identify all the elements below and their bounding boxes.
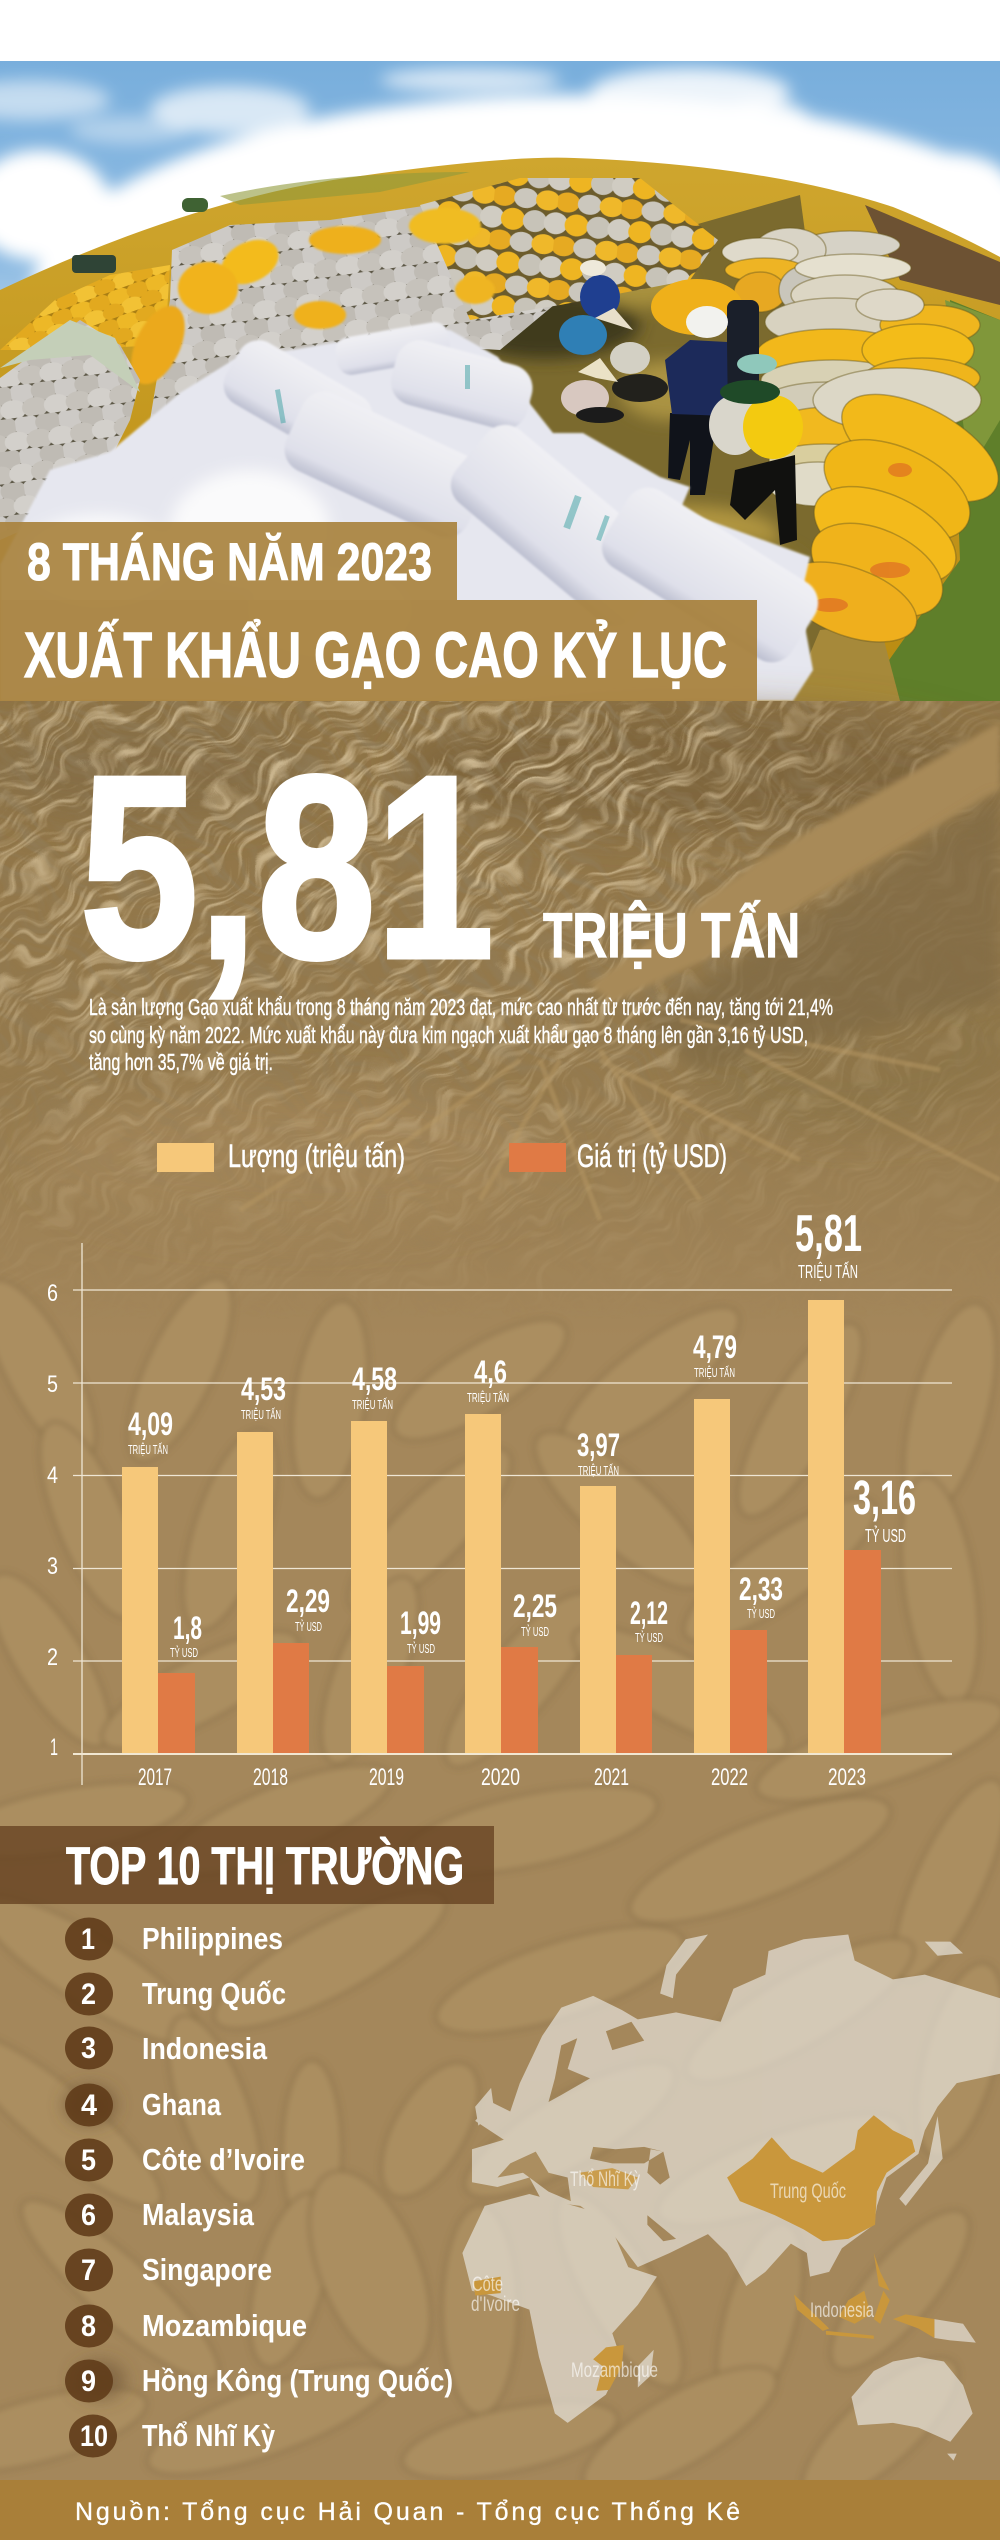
ranked list of markets: 1 bbox=[81, 1923, 95, 1956]
volume value labels: TRIỆU TẤN bbox=[694, 1365, 735, 1380]
ranked list of markets: Ghana bbox=[142, 2087, 222, 2122]
legend: volume label: Lượng (triệu tấn) bbox=[228, 1138, 405, 1174]
right stack of sacks bbox=[722, 228, 1000, 658]
volume value labels: 3,97 bbox=[577, 1427, 620, 1463]
unit: triệu tấn: TRIỆU TẤN bbox=[543, 900, 800, 971]
year labels: 2021 bbox=[594, 1764, 629, 1791]
ranked list of markets bbox=[65, 1918, 453, 2458]
sack piles bbox=[0, 265, 170, 350]
ranked list of markets: Trung Quốc bbox=[142, 1976, 286, 2011]
price value labels: TỶ USD bbox=[747, 1606, 775, 1621]
panel: rice grain background bbox=[0, 1265, 1000, 2524]
ranked list of markets: Mozambique bbox=[142, 2308, 307, 2343]
y axis labels: 5 bbox=[47, 1371, 58, 1398]
big number 5,81: 5,81 bbox=[80, 723, 494, 1013]
price value labels: TỶ USD bbox=[635, 1630, 663, 1645]
price value labels bbox=[170, 1472, 916, 1660]
ranked list of markets: 6 bbox=[81, 2199, 96, 2232]
section heading: top 10 markets: TOP 10 THỊ TRƯỜNG bbox=[66, 1836, 464, 1896]
ranked list of markets: 8 bbox=[81, 2310, 96, 2343]
map highlight: China bbox=[727, 2115, 915, 2241]
y axis labels: 2 bbox=[47, 1644, 58, 1671]
chart legend bbox=[157, 1138, 727, 1174]
banner: xuất khẩu gạo cao kỷ lục bbox=[0, 600, 757, 701]
world map with highlighted markets bbox=[462, 1934, 1000, 2461]
panel: hero photo of rice sacks and workers bbox=[0, 61, 1000, 701]
price value labels: TỶ USD bbox=[521, 1624, 549, 1639]
price value labels: TỶ USD bbox=[865, 1525, 906, 1546]
map highlight: Mozambique bbox=[593, 2345, 624, 2391]
year labels bbox=[138, 1764, 866, 1791]
panel: title banners bbox=[0, 522, 757, 701]
y axis labels: 1 bbox=[50, 1734, 58, 1761]
banner: 8 tháng năm 2023: 8 THÁNG NĂM 2023 bbox=[27, 532, 432, 592]
volume value labels: 4,79 bbox=[693, 1329, 737, 1365]
volume value labels: TRIỆU TẤN bbox=[467, 1390, 509, 1405]
map labels: Indonesia bbox=[810, 2299, 874, 2322]
banner: xuất khẩu gạo cao kỷ lục: XUẤT KHẨU GẠO CAO KỶ LỤC bbox=[24, 618, 727, 691]
ranked list of markets: Thổ Nhĩ Kỳ bbox=[142, 2418, 276, 2453]
ranked list of markets: 3 bbox=[81, 2032, 96, 2065]
year labels: 2020 bbox=[481, 1764, 520, 1791]
volume value labels bbox=[128, 1205, 862, 1478]
volume value labels: TRIỆU TẤN bbox=[241, 1407, 281, 1422]
ranked list of markets: Singapore bbox=[142, 2252, 272, 2287]
value bars bbox=[158, 1550, 881, 1754]
year labels: 2022 bbox=[711, 1764, 748, 1791]
volume value labels: 4,6 bbox=[474, 1354, 507, 1390]
workers bbox=[559, 260, 803, 545]
banner: 8 tháng năm 2023 bbox=[0, 522, 457, 600]
volume value labels: TRIỆU TẤN bbox=[798, 1261, 858, 1282]
ranked list of markets: 7 bbox=[81, 2254, 96, 2287]
ranked list of markets: 5 bbox=[81, 2144, 96, 2177]
volume value labels: TRIỆU TẤN bbox=[128, 1442, 168, 1457]
y axis labels: 6 bbox=[47, 1280, 58, 1307]
footer: source line: Nguồn: Tổng cục Hải Quan - Tổng cục Thống Kê bbox=[75, 2498, 740, 2526]
price value labels: TỶ USD bbox=[407, 1641, 435, 1656]
volume bars bbox=[122, 1300, 844, 1754]
volume value labels: 4,09 bbox=[128, 1406, 173, 1442]
text block: summary paragraph bbox=[89, 994, 833, 1075]
bar chart: export volume and value 2017-2023 bbox=[47, 1205, 952, 1791]
year labels: 2017 bbox=[138, 1764, 172, 1791]
map highlight: Turkey bbox=[579, 2168, 638, 2189]
map labels: d'Ivoire bbox=[471, 2293, 520, 2316]
price value labels: 2,25 bbox=[513, 1588, 557, 1624]
text block: summary paragraph: tăng hơn 35,7% về giá trị. bbox=[89, 1049, 273, 1075]
year labels: 2019 bbox=[369, 1764, 404, 1791]
map labels: Trung Quốc bbox=[770, 2180, 846, 2203]
price value labels: 2,12 bbox=[630, 1595, 668, 1631]
ranked list of markets: 4 bbox=[81, 2089, 97, 2122]
volume value labels: 4,53 bbox=[241, 1371, 286, 1407]
y axis labels: 3 bbox=[47, 1553, 58, 1580]
ranked list of markets: 2 bbox=[81, 1978, 96, 2011]
volume value labels: 5,81 bbox=[795, 1205, 862, 1263]
ranked list of markets: Indonesia bbox=[142, 2031, 268, 2066]
price value labels: TỶ USD bbox=[295, 1619, 322, 1634]
footer: source line bbox=[0, 2480, 1000, 2540]
ranked list of markets: Hồng Kông (Trung Quốc) bbox=[142, 2363, 453, 2398]
volume value labels: 4,58 bbox=[352, 1361, 397, 1397]
price value labels: 2,33 bbox=[739, 1571, 783, 1607]
year labels: 2023 bbox=[828, 1764, 866, 1791]
section heading: top 10 markets bbox=[0, 1826, 494, 1904]
bank and grass bbox=[865, 205, 1000, 305]
price value labels: 1,8 bbox=[173, 1610, 202, 1646]
price value labels: 3,16 bbox=[853, 1472, 916, 1525]
map highlight: Côte d'Ivoire bbox=[473, 2277, 501, 2295]
ranked list of markets: Malaysia bbox=[142, 2197, 255, 2232]
price value labels: TỶ USD bbox=[170, 1645, 198, 1660]
price value labels: 1,99 bbox=[400, 1605, 441, 1641]
volume value labels: TRIỆU TẤN bbox=[352, 1397, 393, 1412]
ranked list of markets: 9 bbox=[81, 2365, 96, 2398]
volume value labels: TRIỆU TẤN bbox=[578, 1463, 619, 1478]
ranked list of markets: Côte d’Ivoire bbox=[142, 2142, 305, 2177]
y axis labels bbox=[47, 1280, 58, 1761]
map highlight: Indonesia bbox=[794, 2253, 934, 2339]
ranked list of markets: 10 bbox=[80, 2420, 108, 2453]
panel: straw texture background bbox=[0, 679, 1000, 2480]
map labels bbox=[471, 2168, 874, 2382]
field bbox=[0, 158, 1000, 701]
y axis labels: 4 bbox=[47, 1462, 58, 1489]
year labels: 2018 bbox=[253, 1764, 288, 1791]
dirt and straw ground bbox=[482, 195, 828, 655]
foreground white bags bbox=[0, 320, 827, 701]
ranked list of markets: Philippines bbox=[142, 1921, 283, 1956]
price value labels: 2,29 bbox=[286, 1583, 330, 1619]
map labels: Thổ Nhĩ Kỳ bbox=[570, 2168, 640, 2191]
legend: value label: Giá trị (tỷ USD) bbox=[577, 1138, 727, 1174]
map labels: Côte bbox=[472, 2273, 503, 2296]
map labels: Mozambique bbox=[571, 2359, 658, 2382]
legend: volume swatch bbox=[157, 1143, 214, 1172]
legend: value swatch bbox=[509, 1143, 566, 1172]
